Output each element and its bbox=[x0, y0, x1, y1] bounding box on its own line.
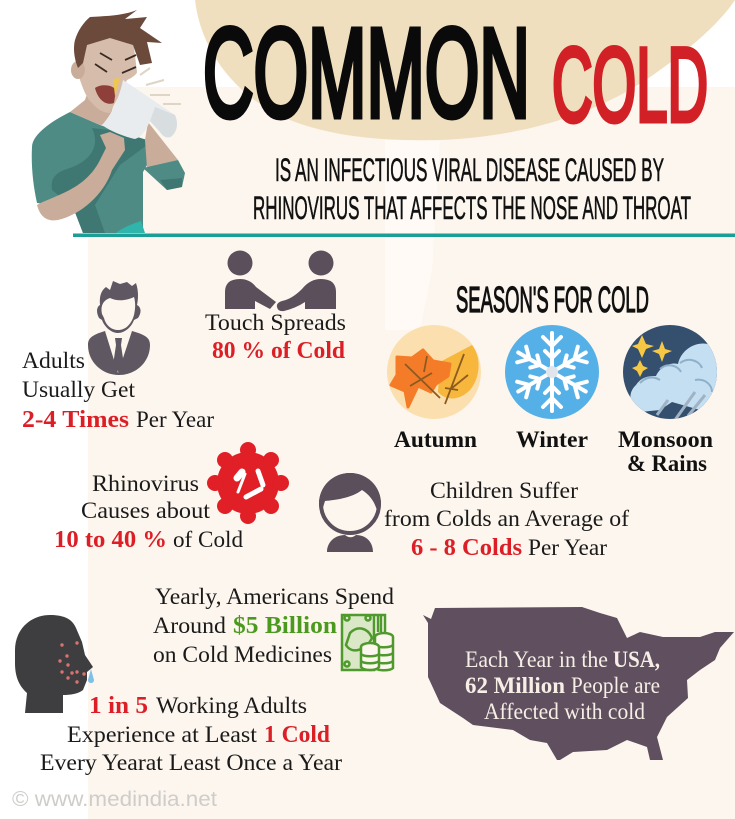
text: season names bbox=[394, 427, 713, 476]
text: adults: Usually Get bbox=[22, 377, 136, 402]
text: children: Children Suffer bbox=[430, 478, 578, 503]
icon: child bbox=[319, 473, 381, 552]
watermark: © www.medindia.net bbox=[12, 788, 217, 811]
icon: money and coins bbox=[342, 615, 393, 670]
icon: head with sneeze droplets bbox=[15, 615, 94, 713]
map: USA with text: USA, bbox=[613, 647, 660, 672]
text: medicine spending bbox=[153, 584, 395, 667]
map: USA with text: People are bbox=[571, 673, 660, 698]
map: USA with text: Affected with cold bbox=[484, 699, 645, 724]
text: season names: Autumn bbox=[394, 427, 477, 452]
text: touch spreads bbox=[205, 310, 346, 364]
text: season names: & Rains bbox=[627, 451, 707, 476]
text: rhinovirus: of Cold bbox=[173, 527, 244, 552]
map: USA with text: 62 Million bbox=[465, 673, 565, 698]
text: touch spreads: Touch Spreads bbox=[205, 310, 346, 335]
text: rhinovirus: Rhinovirus bbox=[92, 471, 199, 496]
text: medicine spending: Yearly, Americans Spend bbox=[155, 584, 395, 609]
text: season names: Winter bbox=[516, 427, 588, 452]
text: children: Per Year bbox=[528, 535, 607, 560]
text: working adults: 1 in 5 bbox=[89, 693, 148, 719]
text: children: from Colds an Average of bbox=[384, 506, 629, 531]
icon: adult in suit bbox=[88, 281, 150, 375]
text: adults: Per Year bbox=[136, 407, 214, 432]
text: working adults bbox=[40, 693, 342, 775]
text: adults: 2-4 Times bbox=[22, 407, 129, 433]
text: season names: Monsoon bbox=[618, 427, 713, 452]
subtitle bbox=[253, 152, 691, 226]
text: working adults: Working Adults bbox=[156, 693, 307, 718]
text: rhinovirus bbox=[54, 471, 244, 553]
text: children bbox=[384, 478, 629, 561]
map: USA with text bbox=[423, 607, 734, 760]
icon: monsoon bbox=[623, 325, 725, 420]
text: rhinovirus: Causes about bbox=[81, 498, 211, 523]
text: working adults: 1 Cold bbox=[264, 722, 331, 748]
text: medicine spending: $5 Billion bbox=[233, 613, 337, 639]
map: USA with text: Each Year in the bbox=[465, 647, 608, 672]
text: adults: Adults bbox=[22, 348, 85, 373]
text: medicine spending: Around bbox=[153, 613, 227, 638]
text: rhinovirus: 10 to 40 % bbox=[54, 527, 167, 553]
icon: rhinovirus bbox=[207, 442, 289, 524]
icon: handshake bbox=[225, 250, 336, 311]
illustration: man sneezing into tissue bbox=[32, 10, 185, 233]
icon: autumn bbox=[387, 325, 481, 419]
icon: winter bbox=[505, 325, 599, 419]
text: touch spreads: 80 % of Cold bbox=[212, 338, 346, 364]
text: working adults: Every Yearat Least Once a Year bbox=[40, 750, 342, 775]
text: medicine spending: on Cold Medicines bbox=[153, 642, 332, 667]
text: working adults: Experience at Least bbox=[67, 722, 258, 747]
text: children: 6 - 8 Colds bbox=[411, 535, 522, 561]
text: adults bbox=[22, 348, 214, 433]
